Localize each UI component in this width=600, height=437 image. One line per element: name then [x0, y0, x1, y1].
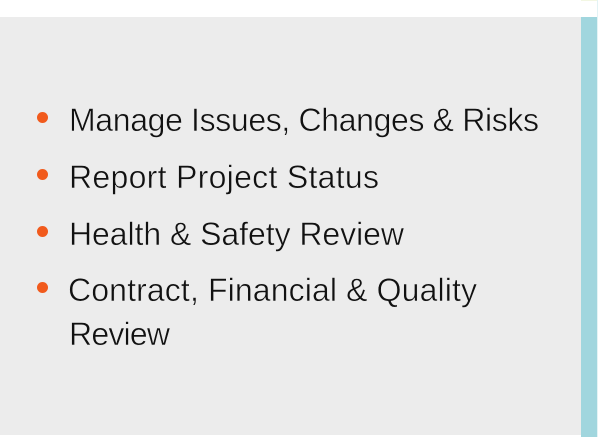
bullet item: contract, financial and quality: Contract, Financial & Quality [68, 272, 477, 308]
bullet item: contract, financial and quality: Review [69, 316, 171, 352]
bullet list [37, 102, 539, 352]
teal side bar [581, 17, 597, 437]
bullet item: manage issues: Manage Issues, Changes & Risks [69, 102, 539, 138]
bullet item: report status: Report Project Status [69, 159, 379, 195]
bullet item: health and safety: Health & Safety Review [69, 216, 405, 252]
bullet item: contract, financial and quality [37, 272, 477, 352]
